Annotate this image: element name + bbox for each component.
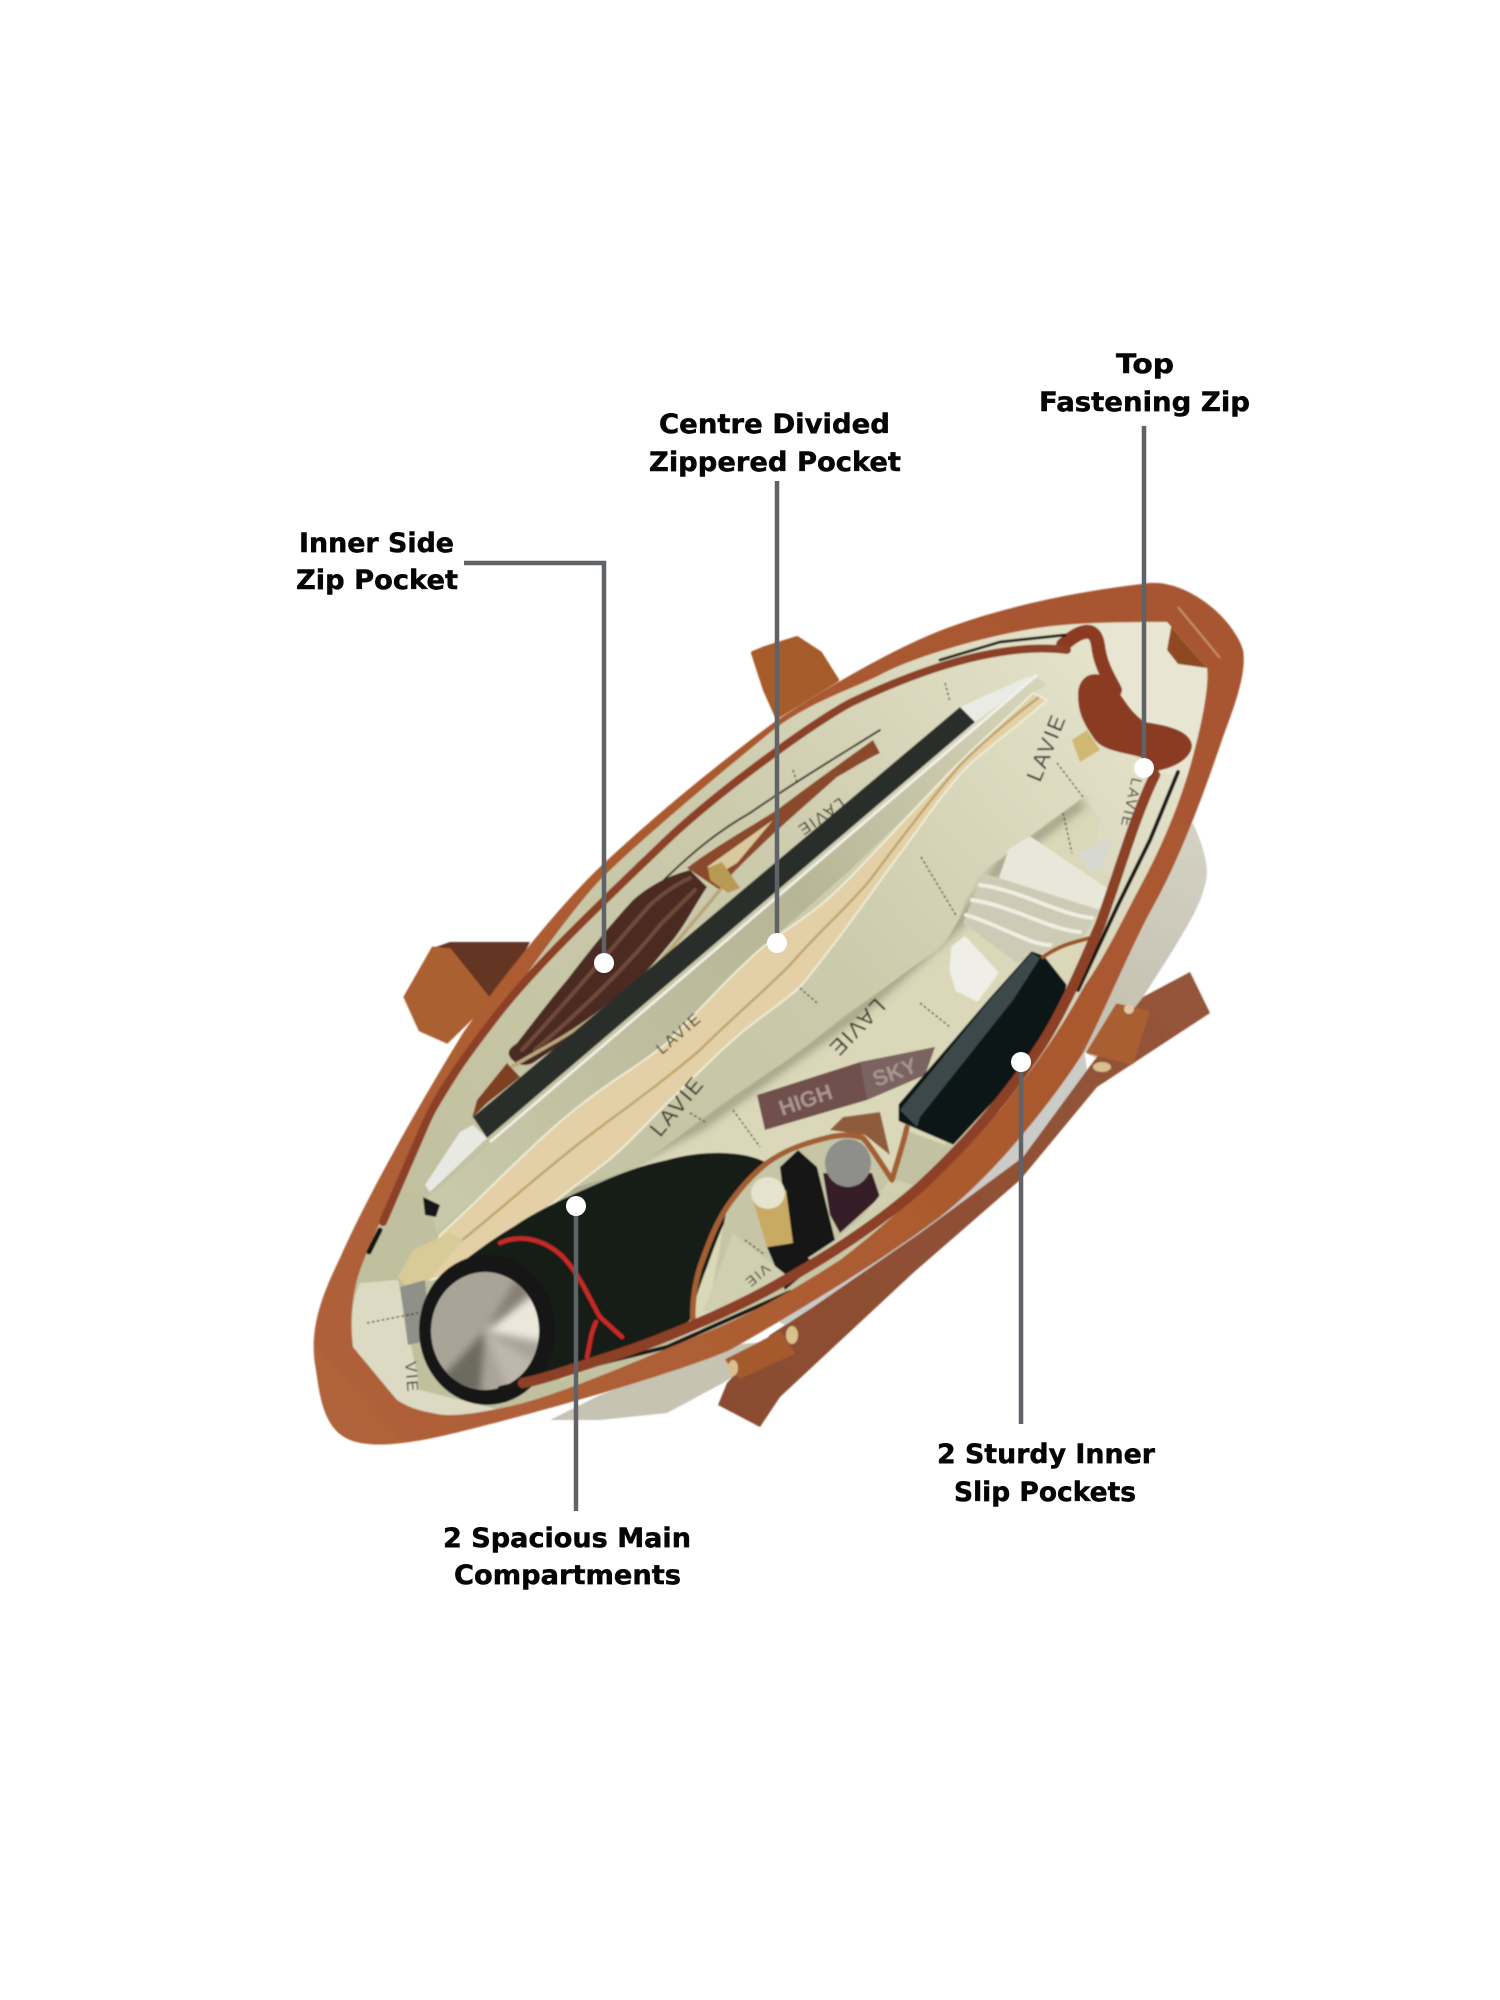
white plug: [951, 938, 997, 1000]
dark lower lipstick: [767, 1243, 815, 1290]
bag interior: [340, 610, 1220, 1420]
slip pocket side fabric: [895, 1130, 953, 1187]
round tube: [823, 1173, 880, 1233]
label: [443, 1523, 691, 1591]
label: [649, 409, 901, 478]
red bottle band: [500, 1239, 622, 1357]
tan wallet corner: [472, 1063, 520, 1118]
rim corner stitching: [1178, 607, 1220, 658]
leader line: [574, 1206, 578, 1511]
VIE lining print: VIE: [401, 1361, 421, 1394]
silver bottle neck: [400, 1280, 430, 1345]
bag body exterior bottom: [550, 1340, 790, 1420]
callout: Centre Divided Zippered Pocket: [649, 409, 901, 953]
pocket interior: [712, 1137, 890, 1290]
laptop black foot: [423, 1197, 440, 1217]
label: Inner Side: [299, 528, 454, 559]
bag body exterior right: [1060, 823, 1207, 1060]
yellow lipstick: [752, 1190, 793, 1247]
label: [1039, 349, 1250, 418]
brown quilted wallet: [509, 870, 720, 1066]
label: [296, 528, 458, 596]
LAVIE lining print: LAVIE: [1117, 776, 1145, 830]
label: Compartments: [454, 1560, 681, 1591]
water bottle: [467, 1152, 765, 1374]
mascara tube: [757, 1047, 935, 1130]
strap tab right: [1088, 1004, 1148, 1072]
dot: [1134, 758, 1154, 778]
leader line: [464, 563, 604, 963]
mascara second label: SKY: [869, 1053, 921, 1092]
black lipstick: [780, 1150, 835, 1263]
VIE lining print: VIE: [741, 1261, 773, 1291]
leader line: [775, 481, 779, 943]
lower zipper: [523, 775, 1155, 1383]
rim inner flap: [1167, 622, 1207, 668]
gold wallet puller: [708, 862, 740, 893]
callout: Top Fastening Zip: [1039, 349, 1250, 778]
laptop silver edge: [490, 675, 1037, 1142]
LAVIE lining print: LAVIE: [823, 994, 890, 1062]
upper slip pocket trim: [1043, 938, 1090, 957]
laptop silver corner: [425, 1125, 487, 1192]
zip ribbon upper: [1063, 632, 1115, 690]
strap tab lower: [727, 1326, 798, 1377]
centre pocket fabric: [576, 796, 1082, 1187]
callout: 2 Spacious Main Compartments: [443, 1196, 691, 1591]
label: Zippered Pocket: [649, 447, 901, 478]
light lower right wedge: [485, 1336, 532, 1384]
dark top wedge: [487, 1281, 530, 1329]
zipper end left: [369, 1230, 380, 1252]
front strap: [718, 972, 1210, 1427]
laptop black lid: [473, 707, 975, 1138]
label: Top: [1116, 349, 1174, 380]
label: Slip Pockets: [954, 1477, 1136, 1508]
tan leather rim: [314, 583, 1244, 1445]
label: Fastening Zip: [1039, 387, 1250, 418]
brown pocket trim: [687, 740, 880, 890]
dot: [566, 1196, 586, 1216]
lipstick cap: [751, 1177, 785, 1209]
light grey body strip: [775, 1040, 1087, 1325]
label: Centre Divided: [659, 409, 890, 440]
LAVIE lining print: LAVIE: [1021, 710, 1071, 785]
slip pocket face: [703, 1160, 947, 1312]
black piping: [940, 635, 1065, 660]
dot: [767, 933, 787, 953]
zip ribbon knot: [1078, 674, 1192, 772]
leader line: [1019, 1062, 1023, 1424]
dot: [594, 953, 614, 973]
top right ruffled lining: [1122, 622, 1202, 776]
slip pocket tan trim: [693, 1127, 907, 1320]
laptop olive back: [428, 677, 1047, 1233]
leader line: [1142, 426, 1146, 768]
back handle left: [405, 942, 530, 1042]
right black piping: [1078, 772, 1178, 990]
gold zipper puller: [398, 1233, 463, 1287]
upper zipper: [383, 649, 1067, 1222]
callout: Inner Side Zip Pocket: [296, 528, 614, 973]
LAVIE lining print: LAVIE: [645, 1071, 709, 1141]
bright wedge: [485, 1296, 540, 1346]
tube silver lid: [825, 1139, 871, 1187]
label: [937, 1439, 1156, 1508]
back handle top: [753, 638, 837, 717]
mascara lettering: HIGH: [775, 1079, 836, 1121]
white charger: [1000, 838, 1107, 912]
bottom left ruffled lining: [350, 1280, 496, 1416]
fold shadow: [567, 802, 1083, 1195]
grey plug connector: [1077, 840, 1113, 872]
centre zipper tape: [430, 693, 1047, 1280]
laptop upper silver end: [960, 677, 1037, 722]
label: 2 Spacious Main: [443, 1523, 691, 1554]
LAVIE lining print: LAVIE: [653, 1010, 706, 1058]
back compartment wall: [560, 797, 1120, 1380]
LAVIE lining print: LAVIE: [793, 794, 847, 839]
cosmetics in slip pocket: [712, 1137, 890, 1290]
interior lining base: [340, 610, 1220, 1420]
label: 2 Sturdy Inner: [937, 1439, 1156, 1470]
gold zip tag: [1072, 730, 1100, 762]
tan pad behind slip pocket: [830, 1112, 890, 1155]
upper pocket piping: [662, 728, 882, 881]
lower black piping: [500, 1292, 790, 1388]
bag photograph illustration: [314, 583, 1244, 1445]
lining dotted print: [367, 683, 1083, 1323]
dot: [1011, 1052, 1031, 1072]
cream pocket tape: [707, 820, 773, 872]
coiled white cable: [963, 873, 1100, 963]
dark lower wedge: [444, 1332, 488, 1390]
callout: 2 Sturdy Inner Slip Pockets: [937, 1052, 1156, 1508]
label: Zip Pocket: [296, 565, 458, 596]
bottle cap: [418, 1258, 540, 1406]
black power bank: [900, 953, 1065, 1143]
